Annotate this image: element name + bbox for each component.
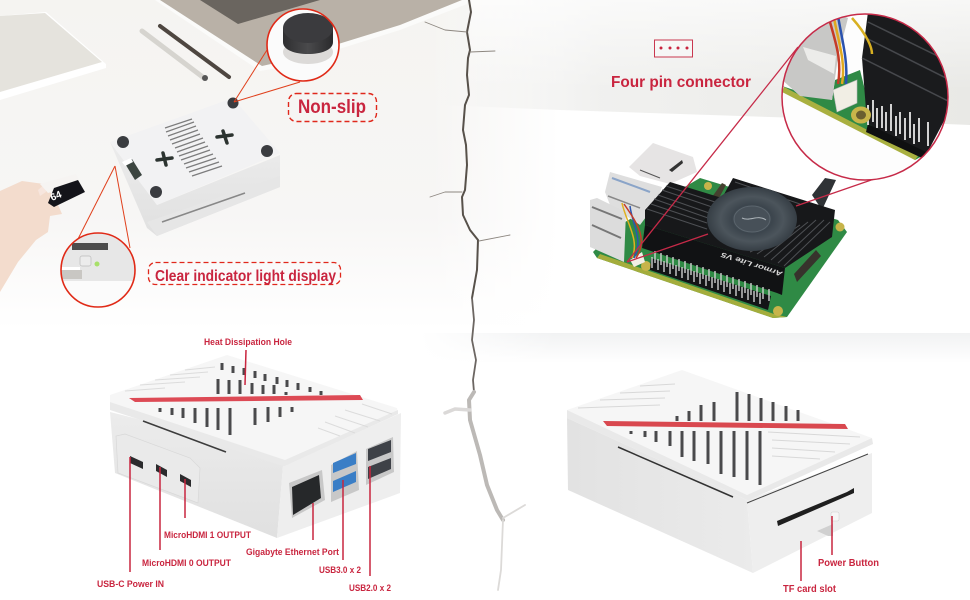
vents [165,119,222,176]
TF card slot [777,488,854,526]
label: Power Button: Power Button [818,558,879,569]
label: Gigabyte Ethernet Port: Gigabyte Ethernet Port [246,547,340,558]
magnifier callout lines [627,47,877,262]
Raspberry Pi board with heatsink and fan [590,143,847,318]
rubber feet [117,98,273,198]
crack in the wall [425,0,525,590]
magnifier: four pin connector close-up [781,13,949,181]
GPIO header [650,258,771,310]
white connector [833,80,857,112]
body right side [747,453,872,573]
heat dissipation slits [160,363,321,435]
body right side [277,413,401,538]
heatsink top fins [645,178,835,268]
heatsink [862,14,948,152]
power button [831,512,839,521]
notebook on desk [0,12,106,100]
label: MicroHDMI 0 OUTPUT: MicroHDMI 0 OUTPUT [142,558,231,569]
lid [567,370,872,495]
card notch [817,524,833,536]
heatsink fin lines [647,182,830,266]
header pins [866,124,926,158]
label: Non-slip [288,94,376,122]
GPIO opening [124,159,142,180]
mounting hole [851,106,871,124]
label: USB3.0 x 2: USB3.0 x 2 [319,565,361,576]
magnifier: indicator light [60,233,140,311]
USB 3 port [331,451,359,502]
case, card slot side view [567,370,873,573]
label: Clear indicator light display: Clear indicator light display [155,268,336,285]
label: USB-C Power IN: USB-C Power IN [97,579,164,590]
ethernet port [289,470,325,518]
port panel recess [116,434,200,503]
label: Four pin connector: Four pin connector [611,74,751,91]
micro cable [812,178,836,210]
pens [142,26,229,81]
icon: four pin connector [654,40,692,57]
case, port side view [110,355,401,538]
annotation pointers: port side [130,350,370,576]
side slot [143,421,226,452]
ribbon connector [794,250,821,282]
ribbon connector rear [712,183,726,200]
side seam [618,447,733,497]
PCB [593,178,847,318]
body left side [110,412,283,538]
fan [707,187,797,251]
hand holding micro SD card: 64 [49,189,64,204]
laptop on desk [155,0,467,71]
red strip [129,395,363,402]
label: Clear indicator light display [148,262,340,285]
red strip [603,421,848,429]
plus cut-outs [157,131,232,165]
USB 2 port [366,437,394,485]
USB 3 port [605,172,662,225]
heatsink front wall [642,225,785,295]
USB-C port [130,456,143,469]
lid diagonal ribs [578,384,860,459]
board strip [782,70,930,160]
ethernet port [629,143,697,184]
label: USB2.0 x 2: USB2.0 x 2 [349,583,391,594]
callout lines: non-slip [234,50,300,102]
micro HDMI ports [156,464,167,477]
heat dissipation slits [631,392,798,485]
lid diagonal ribs [125,367,392,436]
wires [830,16,872,84]
annotation pointers: card side [801,516,832,581]
product name on heatsink: Armor Lite V5 [720,250,785,277]
label: Heat Dissipation Hole: Heat Dissipation Hole [204,337,292,348]
lid [110,355,398,466]
hand holding micro SD card [0,174,85,292]
label: MicroHDMI 1 OUTPUT: MicroHDMI 1 OUTPUT [164,530,251,541]
body left side [567,418,753,573]
label: TF card slot: TF card slot [783,584,837,595]
USB 2 port [590,198,626,262]
callout lines: indicator light [78,166,130,248]
underside case with rubber feet [110,98,280,236]
label: Non-slip: Non-slip [298,97,366,118]
four pin connector and wires [630,252,645,267]
magnifier: rubber foot [267,9,339,81]
mounting holes [641,182,844,316]
USB port [784,17,848,100]
